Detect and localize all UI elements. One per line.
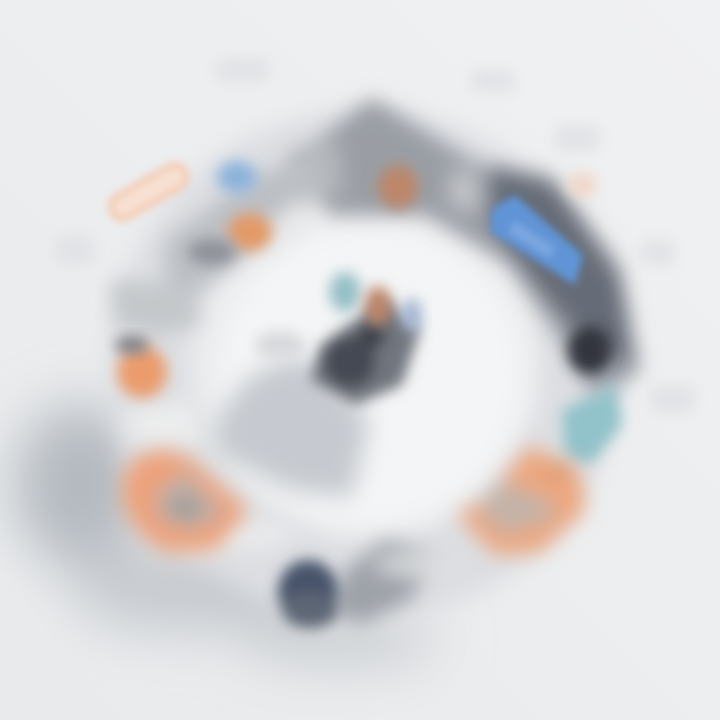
ring: base (150, 150, 580, 580)
ring: upper right dark segment (285, 98, 640, 400)
ring: left grey segment (110, 155, 320, 445)
ring: bottom grey segment (185, 519, 465, 625)
icon: small orange top right (568, 173, 596, 197)
icon: orange lower left (122, 451, 248, 552)
ring: inner white (220, 225, 520, 525)
icon: dark navy bottom (278, 560, 338, 628)
icon: orange top (378, 165, 418, 209)
centre: orange accent (365, 286, 391, 326)
icon: dark spot left (115, 336, 149, 354)
icon: blue top left (217, 161, 257, 193)
icon: blue panel (490, 195, 583, 285)
centre: dark icon (254, 298, 420, 405)
centre: teal accent (329, 272, 361, 312)
centre: grey card (215, 355, 370, 498)
centre: blue accent (402, 298, 422, 332)
callout: orange pill outline (106, 160, 191, 223)
icon: orange lower right (458, 445, 585, 555)
icon: orange top left (228, 213, 272, 251)
icon: dark spot top left (188, 239, 236, 265)
icon: dark block (568, 326, 612, 374)
cast shadow (15, 405, 440, 662)
icon: orange left (117, 346, 167, 398)
faint background labels (55, 58, 695, 413)
icon: teal block (562, 385, 622, 465)
